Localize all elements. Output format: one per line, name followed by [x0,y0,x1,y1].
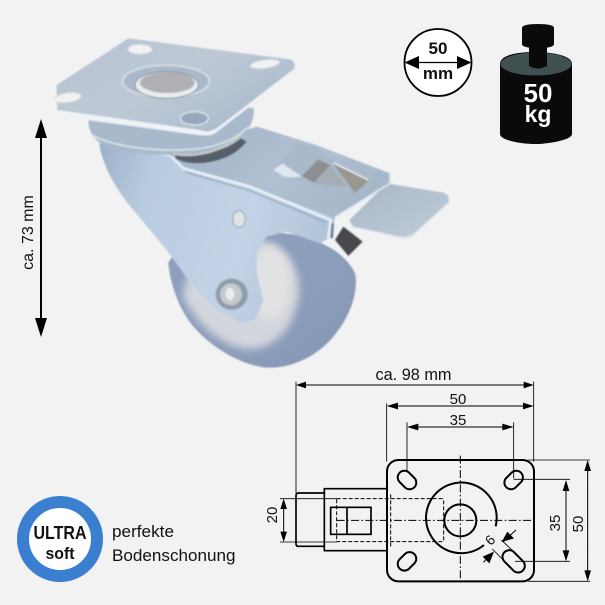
hidden lines [337,494,444,547]
center rivet [123,65,209,97]
ULTRA soft badge: soft [46,544,75,563]
swivel shadow [175,130,247,163]
fork side view [296,489,387,551]
drawing labels: 6 [482,531,499,548]
diameter icon: 50 mm [404,29,472,96]
weight handle [529,42,547,68]
fork rivet hole [233,211,245,227]
axle bolt [216,279,248,310]
center rings [426,483,497,553]
diameter icon: 50 mm: 50 [429,39,447,58]
diameter icon: 50 mm: mm [423,64,453,83]
brake dark clip [335,227,363,256]
caption: perfekte Bodenschonung [112,522,236,565]
ULTRA soft badge: ULTRA [34,523,86,543]
drawing labels: 50 [570,516,587,532]
fork body [99,143,335,323]
fork ridge [172,157,331,238]
drawing labels: 35 [547,515,564,531]
mounting plate [54,38,295,136]
drawing labels [264,366,587,548]
drawing labels: 35 [450,412,466,429]
brake top plate [170,127,390,217]
caption: perfekte Bodenschonung: perfekte [112,522,174,541]
photo: swivel caster with brake [54,38,449,368]
drawing labels: ca. 98 mm [375,366,452,384]
plate holes [128,45,152,54]
weight icon: 50 kg: 50 [524,78,552,108]
weight icon: 50 kg [500,24,572,144]
double arrowheads [404,56,472,69]
weight top face [500,52,572,76]
wheel [168,233,356,368]
weight icon: 50 kg: kg [525,101,551,127]
plate slots [395,468,528,575]
centerlines [337,456,537,583]
dimension extension lines [280,382,590,581]
technical drawing [280,382,591,583]
swivel ring [88,103,254,155]
drawing labels: 20 [264,507,281,523]
plate outline [387,460,534,581]
height dimension: ca. 73 mm: ca. 73 mm [20,195,37,270]
drawing labels: 50 [450,391,466,408]
brake latch [273,145,368,194]
height dimension: ca. 73 mm [20,119,47,337]
dimension arrowheads [280,382,591,581]
ULTRA soft badge [23,502,97,576]
dimension lines [284,385,588,578]
brake pedal [349,183,449,239]
caption: perfekte Bodenschonung: Bodenschonung [112,546,236,565]
